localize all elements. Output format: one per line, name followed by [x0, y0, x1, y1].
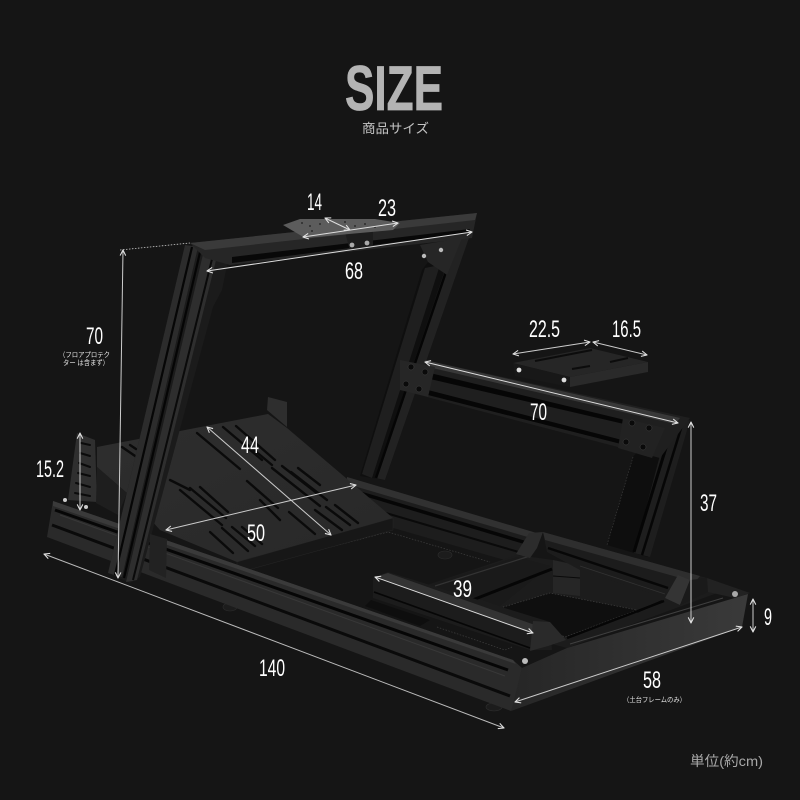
unit note: 単位(約cm) [690, 753, 763, 769]
dimension: top bar 68: 68 [345, 258, 363, 285]
dimension: mid height 37: 37 [700, 490, 717, 517]
dimension: monitor plate 16.5 [593, 316, 647, 355]
right rail end [707, 578, 750, 598]
dimension: base height 9 [753, 599, 772, 632]
dimension: monitor plate 22.5: 22.5 [529, 316, 560, 343]
title: SIZE [345, 54, 443, 124]
dimension: seat bar 39 [375, 576, 533, 633]
mid crossbar [400, 360, 690, 458]
right upright [360, 235, 470, 480]
dimension: plate depth 44: 44 [241, 432, 259, 459]
dimension: base width 58: 58 [643, 667, 661, 694]
pedal plate [97, 397, 393, 573]
seat floor panel [500, 593, 637, 637]
inner frame base [372, 555, 720, 648]
dimension: total length 140: 140 [259, 655, 285, 682]
note: floor protector excluded: ター は含まず） [63, 358, 109, 367]
front seat bar [365, 572, 566, 651]
plate slots [122, 426, 358, 553]
centre block [553, 560, 580, 596]
dimension: pedal bracket 15.2 [36, 433, 80, 510]
dimension: plate width 50 [166, 485, 356, 547]
monitor mount plate [513, 348, 648, 387]
floor feet [223, 551, 502, 711]
rear rail of base [347, 477, 540, 563]
dimension: total length 140 [44, 554, 504, 728]
dimension: wheel plate 23 [303, 195, 398, 237]
dimension: seat bar 39: 39 [453, 576, 472, 603]
dimension: wheel plate 14: 14 [307, 189, 322, 216]
note: base frame only: （土台フレームのみ） [623, 695, 686, 704]
product: racing cockpit frame [47, 213, 750, 711]
subtitle: 商品サイズ [362, 121, 429, 136]
front base face [511, 591, 748, 711]
right connector rail [567, 601, 664, 638]
dimension: wheel plate 14 [307, 189, 350, 230]
dimension: mid bar 70: 70 [530, 399, 547, 426]
floor outline dashed [235, 532, 512, 650]
dimension: pedal bracket 15.2: 15.2 [36, 456, 64, 483]
rear seat bar [516, 532, 708, 605]
plate top [97, 414, 393, 562]
plate front edge [237, 518, 393, 573]
dimension: total height 70: 70 [86, 323, 103, 350]
left base rail [47, 501, 522, 711]
plate tab [267, 397, 287, 427]
dimension: wheel plate 23: 23 [378, 195, 396, 222]
dimension: monitor plate 22.5 [513, 316, 590, 354]
wheel mount plate [283, 219, 400, 251]
dimension: plate depth 44 [207, 427, 331, 535]
note: floor protector excluded: （フロアプロテク [59, 351, 110, 359]
inner seat frame [365, 532, 750, 651]
second upright [607, 420, 690, 557]
pedal bracket [63, 433, 127, 515]
dimension: base width 58 [515, 627, 742, 702]
note: floor protector excluded [59, 351, 110, 367]
dimension: plate width 50: 50 [247, 520, 265, 547]
dimension: base height 9: 9 [764, 604, 772, 631]
top crossbar [190, 213, 477, 265]
dimension: monitor plate 16.5: 16.5 [612, 316, 641, 343]
dimension: mid bar 70 [425, 362, 678, 426]
left connector rail [427, 557, 550, 606]
dimension: top bar 68 [207, 232, 472, 285]
main upright: left [108, 245, 230, 583]
dimension: total height 70 [86, 243, 190, 578]
